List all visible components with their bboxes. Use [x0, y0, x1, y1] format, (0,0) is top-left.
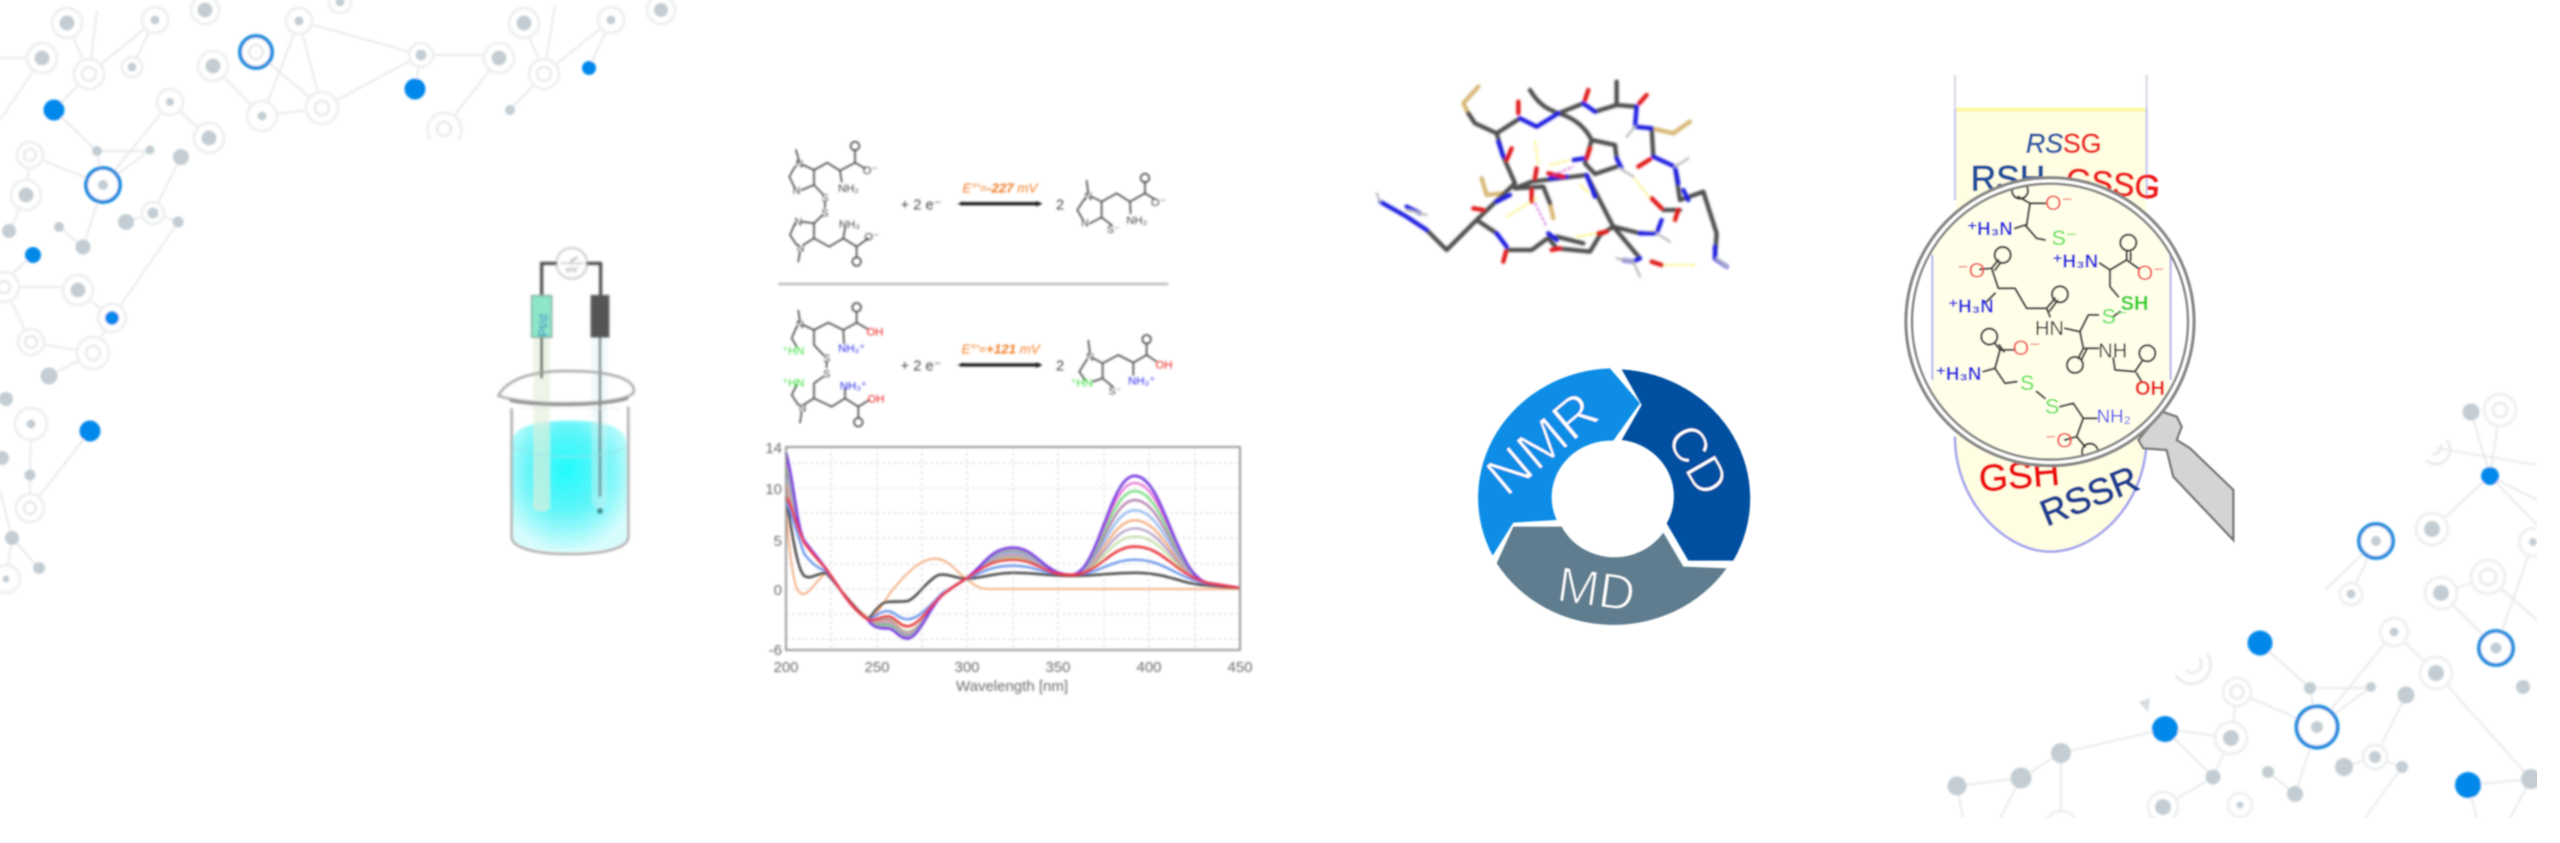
- reaction 2: product: [1070, 335, 1172, 398]
- x axis labels: 450: [1227, 659, 1253, 676]
- decorative molecular network: top left: [0, 0, 675, 593]
- segment: NMR: NMR: [1474, 379, 1610, 507]
- reaction 1: oxidised ergothioneine: NH₃: [839, 219, 860, 231]
- lens with molecular formula: S: [2020, 371, 2034, 395]
- reaction 2: protonated disulfide: NH₃⁺: [840, 380, 867, 392]
- reaction 2: protonated disulfide: S: [823, 368, 830, 380]
- lens with molecular formula: ⁻O: [1957, 258, 1985, 282]
- reference electrode Pt: Pt/d: [536, 314, 550, 337]
- reaction 2: equation: 2: [1056, 359, 1064, 375]
- y axis labels: [765, 440, 782, 659]
- reaction 1: oxidised ergothioneine: O⁻: [863, 165, 877, 177]
- lens with molecular formula: SH: [2121, 293, 2148, 315]
- lens with molecular formula: NH: [2098, 341, 2127, 363]
- reaction 2: protonated disulfide: [782, 303, 884, 427]
- lens with molecular formula: [1906, 177, 2194, 467]
- segment: CD: CD: [1656, 415, 1740, 505]
- reaction 1: oxidised ergothioneine: N: [793, 185, 801, 197]
- reaction 2: protonated disulfide: NH₃⁺: [838, 343, 865, 355]
- reaction 2: protonated disulfide: OH: [866, 326, 883, 338]
- x axis labels: 250: [864, 659, 890, 676]
- label: RSSG: RSSG: [2026, 129, 2102, 159]
- lens with molecular formula: ⁺H₃N: [1967, 218, 2013, 239]
- beaker with electrodes: [498, 248, 634, 554]
- liquid in beaker: [512, 421, 627, 552]
- tube outline: [1955, 75, 2147, 200]
- y axis labels: 0: [774, 582, 782, 599]
- reaction 2: product: S⁻: [1109, 386, 1122, 398]
- lens with molecular formula: ⁺H₃N: [1948, 295, 1994, 316]
- label: GSH: GSH: [1977, 451, 2061, 500]
- lens with molecular formula: O⁻: [2045, 191, 2073, 215]
- reference electrode Pt: [532, 296, 552, 512]
- x axis labels: [773, 659, 1253, 676]
- test tube with magnifying glass: [1906, 75, 2233, 552]
- reaction 1: product: NH₂: [1126, 215, 1147, 227]
- segment: NMR: [1474, 368, 1640, 556]
- reaction 2: product: OH: [1155, 359, 1172, 371]
- lens with molecular formula: O⁻: [2137, 261, 2165, 285]
- decorative molecular network: bottom right: [1948, 394, 2547, 843]
- reaction 1: equation: 2: [1056, 197, 1064, 213]
- reaction 1: oxidised ergothioneine: [789, 142, 879, 266]
- reaction 2: protonated disulfide: N: [799, 403, 807, 415]
- spectra curves: [786, 453, 1240, 638]
- magnifier handle: [2138, 412, 2233, 540]
- reaction 1: oxidised ergothioneine: N: [795, 158, 803, 170]
- reaction 1: oxidised ergothioneine: NH₂: [838, 183, 859, 195]
- chart frame: [786, 447, 1240, 650]
- voltmeter: [556, 248, 587, 279]
- segment: MD: [1497, 527, 1727, 625]
- reaction 2: protonated disulfide: ⁺HN: [782, 346, 804, 358]
- reaction 2: protonated disulfide: OH: [867, 394, 884, 406]
- lens with molecular formula: ⁺H₃N: [2053, 250, 2098, 271]
- reaction 2: protonated disulfide: S: [823, 353, 830, 365]
- tube contents: [1956, 108, 2146, 551]
- lens with molecular formula: ⁻O: [2045, 428, 2073, 452]
- lens with molecular formula: ⁺H₃N: [1936, 363, 1981, 384]
- label: RSSR: RSSR: [2034, 458, 2144, 534]
- chart grid: [786, 447, 1240, 650]
- reaction 1: product: N: [1084, 191, 1092, 203]
- reaction 1: oxidised ergothioneine: N: [794, 217, 802, 229]
- cycle diagram: [1474, 368, 1750, 625]
- reaction 1: product: S⁻: [1107, 224, 1120, 236]
- reaction 2: protonated disulfide: N: [796, 319, 804, 331]
- lens with molecular formula: HN: [2035, 318, 2064, 340]
- reaction 2: protonated disulfide: ⁺HN: [782, 378, 804, 390]
- y axis labels: 10: [765, 481, 782, 498]
- x axis title: Wavelength [nm]: [956, 678, 1068, 695]
- reaction 2: product: NH₃⁺: [1128, 376, 1155, 388]
- peptide 3D stick model: [1377, 82, 1727, 277]
- connecting wires: [542, 263, 601, 295]
- reaction 2: equation: E°'=+121 mV: [961, 341, 1041, 356]
- segment: MD: MD: [1554, 556, 1639, 622]
- reaction schemes: [778, 142, 1172, 427]
- y axis labels: -6: [769, 642, 782, 659]
- label: GSSG: GSSG: [2064, 161, 2162, 206]
- x axis labels: 350: [1045, 659, 1071, 676]
- reaction 1: product: O⁻: [1151, 197, 1166, 209]
- reaction 1: oxidised ergothioneine: S: [821, 192, 829, 204]
- reaction 1: equation: E°'=-227 mV: [962, 181, 1039, 196]
- reaction 1: equation: [901, 181, 1064, 213]
- lens with molecular formula: O⁻: [2013, 336, 2041, 360]
- lens with molecular formula: OH: [2135, 378, 2165, 400]
- line chart: CD spectra: [765, 440, 1253, 695]
- divider between reactions: [778, 279, 1168, 288]
- reaction 1: product: [1077, 174, 1166, 236]
- reaction 1: product: N: [1081, 218, 1089, 230]
- label: RSH: RSH: [1971, 160, 2045, 199]
- lens with molecular formula: S: [2045, 394, 2059, 418]
- beaker glass: [498, 371, 634, 554]
- voltmeter: mV: [566, 265, 578, 274]
- lens with molecular formula: NH₂: [2097, 406, 2131, 427]
- reaction 1: oxidised ergothioneine: O⁻: [864, 232, 879, 244]
- y axis labels: 5: [774, 533, 782, 550]
- y axis labels: 14: [765, 440, 782, 457]
- graphite electrode: [591, 295, 609, 514]
- reaction 2: equation: [901, 341, 1064, 375]
- x axis labels: 400: [1136, 659, 1162, 676]
- x axis labels: 200: [773, 659, 799, 676]
- reaction 1: oxidised ergothioneine: N: [797, 242, 805, 254]
- reaction 2: equation: + 2 e⁻: [901, 359, 941, 375]
- x axis labels: 300: [954, 659, 980, 676]
- reaction 2: product: ⁺HN: [1070, 378, 1093, 390]
- lens with molecular formula: S⁻: [2052, 226, 2077, 250]
- segment: CD: [1622, 369, 1750, 561]
- lens with molecular formula: S⁻: [2102, 304, 2127, 328]
- reaction 1: oxidised ergothioneine: S: [821, 208, 829, 220]
- reaction 2: product: N: [1086, 352, 1094, 364]
- reaction 1: equation: + 2 e⁻: [901, 197, 941, 213]
